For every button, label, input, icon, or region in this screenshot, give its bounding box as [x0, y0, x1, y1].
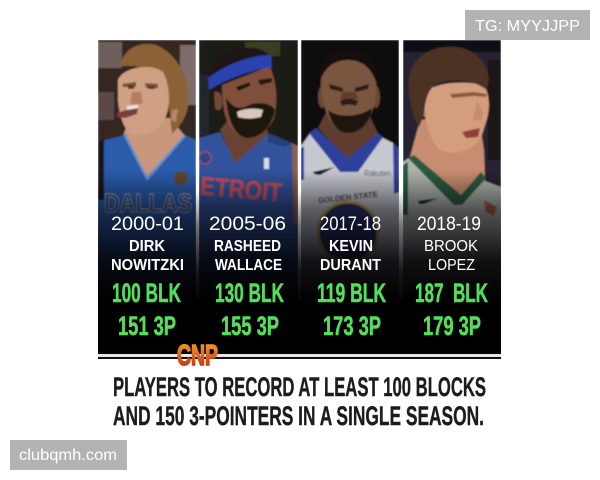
text: Nowitzki stats: NOWITZKI: [111, 257, 184, 274]
text: Durant stats: 119 BLK: [317, 278, 386, 308]
text: Durant stats: 2017-18: [320, 213, 381, 235]
panel: Rasheed Wallace: ETROIT: [199, 171, 283, 208]
text: Durant stats: 173 3P: [323, 311, 381, 341]
watermark: clubqmh: clubqmh.com: [19, 447, 117, 464]
icon: CNP logo: CNP: [177, 340, 218, 372]
text: Lopez stats: 2018-19: [417, 213, 481, 235]
text: Durant stats: [317, 213, 386, 341]
text: Nowitzki stats: 151 3P: [118, 311, 176, 341]
text: Wallace stats: 130 BLK: [215, 278, 284, 308]
text: Wallace stats: WALLACE: [215, 257, 282, 274]
text: Lopez stats: BROOK: [424, 238, 479, 255]
panel: Kevin Durant: [301, 40, 399, 352]
rule under panels: [98, 190, 501, 359]
watermark: TG: [465, 10, 590, 40]
text: Wallace stats: 2005-06: [209, 213, 286, 235]
text: Nowitzki stats: 100 BLK: [112, 278, 181, 308]
title: [113, 372, 486, 431]
text: Wallace stats: RASHEED: [214, 238, 281, 255]
panel: Brook Lopez: [403, 40, 501, 352]
text: Durant stats: KEVIN: [329, 238, 373, 255]
panel: Rasheed Wallace: [199, 40, 298, 352]
panel: Dirk Nowitzki: [98, 40, 196, 352]
text: Wallace stats: [209, 213, 286, 341]
text: Lopez stats: LOPEZ: [428, 257, 475, 274]
panel: Kevin Durant: Rakuten: [364, 169, 391, 178]
text: Lopez stats: 179 3P: [423, 311, 481, 341]
text: Lopez stats: [415, 213, 488, 341]
text: Durant stats: DURANT: [320, 257, 381, 274]
watermark: TG: TG: MYYJJPP: [475, 18, 580, 35]
text: Nowitzki stats: DIRK: [129, 238, 166, 255]
watermark: clubqmh: [10, 440, 127, 470]
text: Nowitzki stats: 2000-01: [111, 213, 184, 235]
panel: Kevin Durant: GOLDEN STATE: [318, 190, 379, 205]
text: Wallace stats: 155 3P: [221, 311, 279, 341]
text: Lopez stats: 187 BLK: [415, 278, 488, 308]
panel: Dirk Nowitzki: DALLAS: [104, 188, 192, 218]
text: Nowitzki stats: [111, 213, 184, 341]
